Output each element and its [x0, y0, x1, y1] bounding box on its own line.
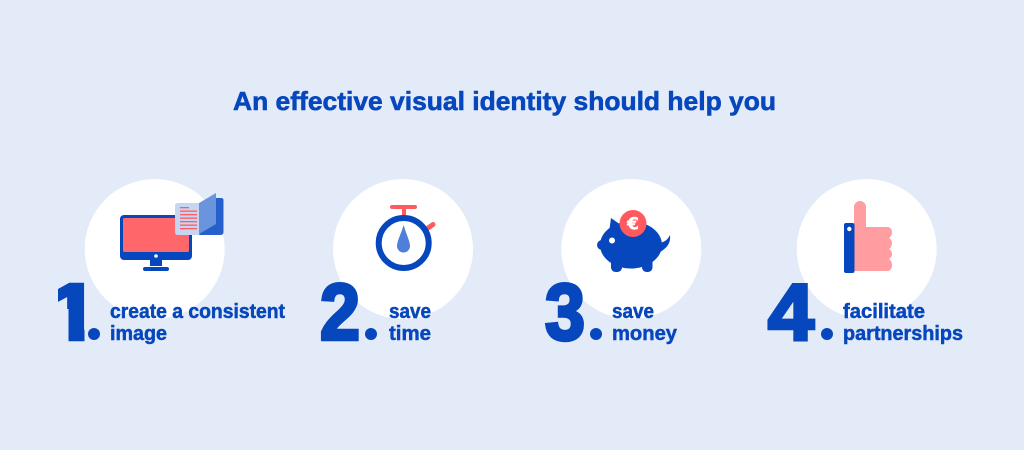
dot 1 [88, 328, 100, 340]
label 3: save [612, 301, 654, 323]
number 1: 1 [47, 268, 99, 356]
icon: monitor and book [120, 193, 224, 271]
icon: piggy bank [597, 210, 670, 272]
label 1: create a consistent [110, 301, 285, 323]
panel: create a consistent image [58, 179, 285, 344]
label 1: image [110, 323, 167, 345]
background circle 3 [561, 179, 701, 319]
background circle 1 [85, 179, 225, 319]
dot 4 [821, 328, 833, 340]
panel: save money [545, 179, 701, 356]
dot 2 [365, 328, 377, 340]
number 2: 2 [320, 268, 360, 356]
label 4: partnerships [843, 323, 963, 345]
icon: thumbs up [844, 201, 892, 273]
background circle 2 [333, 179, 473, 319]
title: An effective visual identity should help you [233, 86, 776, 116]
label 2: time [389, 323, 431, 345]
panel: facilitate partnerships [768, 179, 963, 356]
icon: piggy bank: € [626, 214, 639, 234]
label 2: save [389, 301, 431, 323]
number 4: 4 [768, 268, 815, 356]
dot 3 [590, 328, 602, 340]
number 3: 3 [545, 268, 585, 356]
label 3: money [612, 323, 678, 345]
panel: save time [320, 179, 473, 356]
label 4: facilitate [843, 301, 925, 323]
background circle 4 [797, 179, 937, 319]
icon: stopwatch [379, 205, 433, 268]
